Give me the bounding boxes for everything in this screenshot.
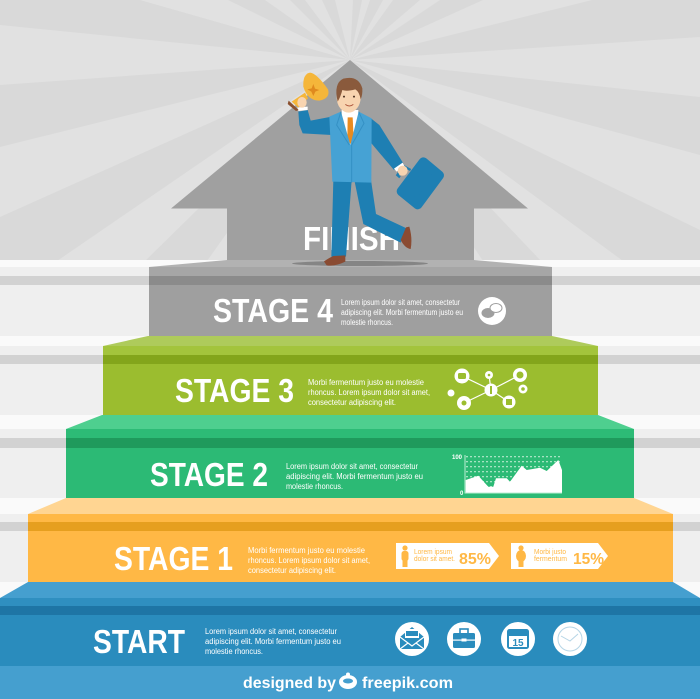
finish label: FINISH <box>303 220 400 257</box>
stage 2 text: molestie rhoncus. <box>286 482 343 491</box>
stage 1 text <box>248 546 370 575</box>
background: sunburst rays <box>0 0 700 261</box>
icon: speech bubbles <box>478 297 506 325</box>
background: wall steps <box>0 260 700 699</box>
panel: stage 1 <box>28 498 673 582</box>
stage 4 text: adipiscing elit. Morbi fermentum justo eu <box>341 308 463 317</box>
stage 4 heading: STAGE 4 <box>213 292 334 329</box>
tag: 85 percent: 85% <box>459 551 491 568</box>
stage 1 text: Morbi fermentum justo eu molestie <box>248 546 366 555</box>
tag: 15 percent: Morbi justo <box>534 547 566 556</box>
icon: envelope <box>395 622 429 656</box>
icon: clock <box>553 622 587 656</box>
credit line: designed by <box>243 675 336 692</box>
right arm <box>370 118 408 176</box>
tag: 85 percent <box>396 543 499 569</box>
stage 1 text: consectetur adipiscing elit. <box>248 566 336 575</box>
stage 3 text: Morbi fermentum justo eu molestie <box>308 378 425 387</box>
panel: stage 4 <box>149 260 552 336</box>
stage 2 text: adipiscing elit. Morbi fermentum justo eu <box>286 472 423 481</box>
stage 3 text <box>308 378 430 407</box>
stage 4 text <box>341 298 463 327</box>
start text: adipiscing elit. Morbi fermentum justo eu <box>205 637 341 646</box>
businessman with trophy and briefcase <box>288 73 439 266</box>
panel: start <box>0 582 700 699</box>
start text: Lorem ipsum dolor sit amet, consectetur <box>205 627 337 636</box>
icon: briefcase <box>447 622 481 656</box>
head <box>336 78 362 113</box>
stage 2 text <box>286 462 423 491</box>
panel: stage 3 <box>103 336 598 415</box>
stage 2 heading: STAGE 2 <box>150 456 268 493</box>
start text: molestie rhoncus. <box>205 647 263 656</box>
area chart <box>452 455 562 497</box>
area chart: 100 <box>452 455 463 461</box>
tag: 85 percent: dolor sit amet. <box>414 554 455 563</box>
stage 4 text: Lorem ipsum dolor sit amet, consectetur <box>341 298 460 307</box>
credit line: freepik.com <box>362 675 453 692</box>
tag: 15 percent <box>511 543 608 569</box>
stage 4 text: molestie rhoncus. <box>341 318 393 327</box>
left leg <box>331 180 352 257</box>
icon: social network <box>448 368 528 410</box>
briefcase <box>397 162 439 205</box>
tag: 15 percent: 15% <box>573 551 604 568</box>
panel: stage 2 <box>66 415 634 498</box>
tag: 15 percent: fermentum <box>534 554 567 563</box>
hand on trophy <box>297 97 307 108</box>
icon: calendar <box>501 622 535 656</box>
tag: 85 percent: Lorem ipsum <box>414 547 452 556</box>
stage 3 text: rhoncus. Lorem ipsum dolor sit amet, <box>308 388 430 397</box>
raised left arm <box>297 107 332 135</box>
area chart: 0 <box>460 491 464 497</box>
stage 2 text: Lorem ipsum dolor sit amet, consectetur <box>286 462 418 471</box>
stage 3 heading: STAGE 3 <box>175 372 294 409</box>
stage 3 text: consectetur adipiscing elit. <box>308 398 396 407</box>
shoes <box>324 227 411 266</box>
start heading: START <box>93 623 185 660</box>
shadow under businessman <box>292 261 428 266</box>
icon: calendar: 15 <box>512 638 524 649</box>
finish arrow <box>171 60 528 261</box>
shirt and neck <box>342 110 358 145</box>
jacket <box>329 112 372 183</box>
trophy <box>288 73 329 111</box>
tie <box>347 117 354 144</box>
stage 1 heading: STAGE 1 <box>114 540 233 577</box>
stage 1 text: rhoncus. Lorem ipsum dolor sit amet, <box>248 556 370 565</box>
credit line <box>243 672 453 692</box>
start text <box>205 627 341 656</box>
right leg <box>354 180 407 243</box>
